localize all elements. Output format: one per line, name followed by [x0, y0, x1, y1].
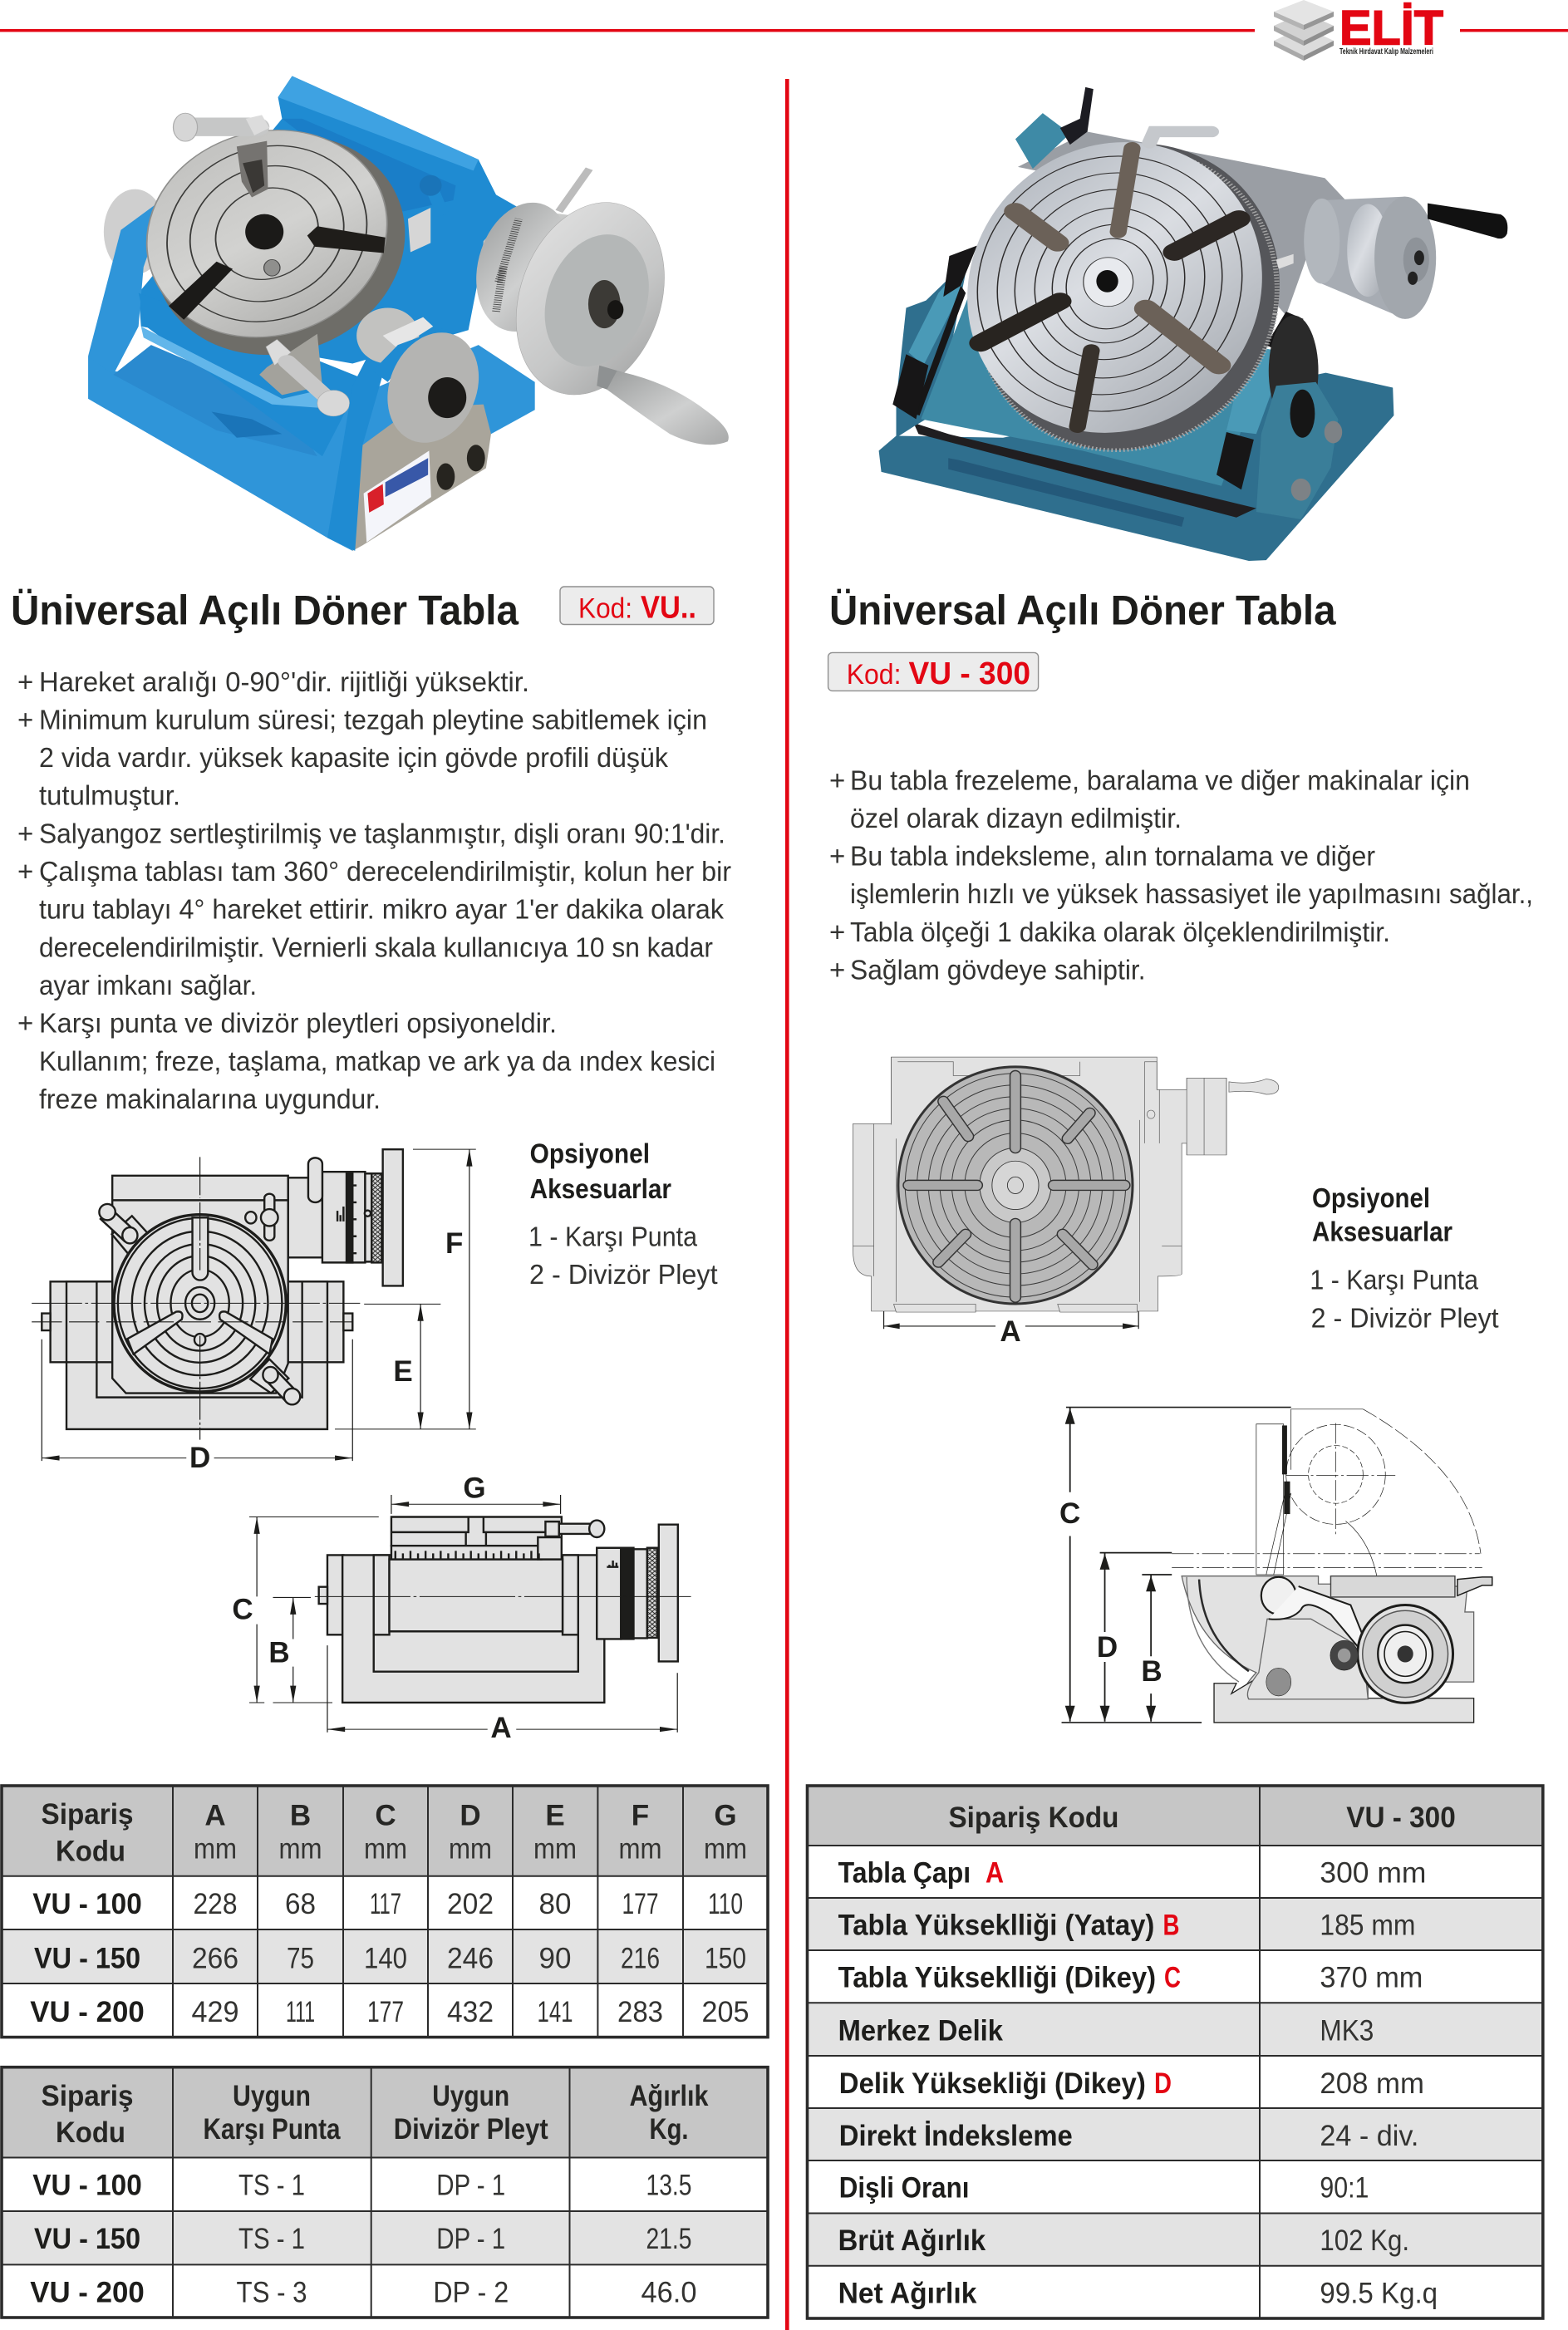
row VU-100: 110 [708, 1888, 743, 1920]
table header row: C [375, 1800, 396, 1832]
row delik yuksekligi: 208 mm [1320, 2067, 1424, 2100]
table header row: F [632, 1800, 649, 1832]
row delik yuksekligi: Delik Yüksekliği (Dikey) [839, 2067, 1146, 2100]
row VU-150 [2, 1929, 768, 1983]
row direkt indeksleme: Direkt İndeksleme [839, 2120, 1073, 2152]
row net agirlik [808, 2266, 1543, 2318]
dimension labels G C B A: G [463, 1472, 486, 1504]
left feature list: freze makinalarına uygundur. [39, 1084, 381, 1114]
row VU-200: 111 [286, 1996, 315, 2028]
dimension labels D E F: E [393, 1355, 413, 1388]
left accessories note: Aksesuarlar [530, 1173, 671, 1204]
code badge VU-300: Kod: [847, 659, 901, 691]
dimension labels G C B A: C [232, 1594, 253, 1625]
table header row: Kodu [56, 2116, 125, 2149]
code badge VU-300: VU - 300 [909, 656, 1030, 691]
right feature list: Bu tabla frezeleme, baralama ve diğer makinalar için [850, 764, 1470, 795]
row VU-100: VU - 100 [32, 2170, 142, 2202]
row merkez delik: MK3 [1320, 2014, 1374, 2047]
table header row: D [460, 1800, 481, 1832]
right accessories note: Opsiyonel [1312, 1182, 1430, 1213]
row VU-150: 266 [192, 1943, 238, 1975]
table header row: A [204, 1800, 226, 1832]
right feature list: özel olarak dizayn edilmiştir. [850, 803, 1182, 833]
row VU-200 [2, 2264, 768, 2318]
row VU-200: 141 [537, 1996, 573, 2028]
row yukseklik yatay [808, 1898, 1543, 1950]
row VU-200: DP - 2 [433, 2277, 509, 2309]
row brut agirlik [808, 2214, 1543, 2266]
left feature list: Karşı punta ve divizör pleytleri opsiyoneldir. [39, 1008, 557, 1039]
table header row: Kg. [650, 2113, 688, 2146]
row VU-150: 140 [364, 1943, 407, 1975]
right feature list: işlemlerin hızlı ve yüksek hassasiyet ile yapılmasını sağlar., [850, 878, 1533, 909]
dimension labels D E F: D [189, 1442, 210, 1474]
code badge VU: Kod: [578, 593, 632, 625]
row direkt indeksleme [808, 2108, 1543, 2160]
dimension labels C D B [1059, 1497, 1162, 1688]
lower index plate [327, 308, 491, 551]
row VU-200 [2, 1983, 768, 2038]
left feature list: + [17, 1008, 33, 1039]
right feature list: Sağlam gövdeye sahiptir. [850, 954, 1146, 985]
table header row [2, 1786, 768, 1876]
row disli orani [808, 2160, 1543, 2214]
row VU-100: VU - 100 [32, 1888, 142, 1920]
row VU-150: 21.5 [646, 2223, 691, 2255]
row VU-150: 246 [447, 1943, 494, 1975]
row net agirlik: 99.5 Kg.q [1320, 2277, 1438, 2309]
row VU-200: 205 [701, 1996, 750, 2028]
table header row: Kodu [56, 1836, 125, 1868]
row yukseklik dikey: Tabla Yükseklliği (Dikey) [838, 1961, 1156, 1993]
row tabla capi: Tabla Çapı [838, 1856, 971, 1889]
dimension labels G C B A: A [490, 1712, 512, 1744]
table header row: mm [194, 1833, 237, 1865]
row VU-200: 177 [367, 1996, 404, 2028]
table header row: mm [704, 1833, 747, 1865]
left accessories note [528, 1138, 718, 1290]
right feature list: Bu tabla indeksleme, alın tornalama ve diğer [850, 841, 1375, 872]
table header row: mm [618, 1833, 661, 1865]
row VU-100: TS - 1 [238, 2170, 305, 2202]
row direkt indeksleme: 24 - div. [1320, 2120, 1418, 2152]
right handwheel [1304, 197, 1507, 319]
right accessories note [1310, 1182, 1499, 1334]
row disli orani: Dişli Oranı [839, 2172, 969, 2205]
left feature list: Hareket aralığı 0-90°'dir. rijitliği yüksektir. [39, 666, 529, 697]
row yukseklik yatay: Tabla Yükseklliği (Yatay) [838, 1910, 1154, 1942]
row yukseklik dikey: 370 mm [1320, 1961, 1423, 1993]
dimension labels D E F: F [445, 1227, 463, 1260]
dimension labels C D B: D [1097, 1631, 1118, 1664]
table header row: mm [449, 1833, 492, 1865]
table header row: Sipariş Kodu [949, 1802, 1118, 1834]
right feature list: + [829, 954, 845, 985]
right feature list: + [829, 841, 845, 872]
code badge VU [560, 587, 714, 626]
left feature list: tutulmuştur. [39, 780, 180, 811]
table: VU dimensions [2, 1786, 768, 2038]
row VU-100: 202 [447, 1888, 494, 1920]
table header row: Uygun [233, 2080, 311, 2112]
right accessories note: 1 - Karşı Punta [1310, 1265, 1479, 1295]
row merkez delik: Merkez Delik [838, 2014, 1003, 2047]
row VU-150: DP - 1 [436, 2223, 505, 2255]
left handwheel [465, 169, 729, 445]
row VU-200: TS - 3 [236, 2277, 307, 2309]
row brut agirlik: 102 Kg. [1320, 2224, 1409, 2257]
header rule left [0, 29, 1255, 32]
right feature list: + [829, 917, 845, 947]
table header row: mm [279, 1833, 322, 1865]
row VU-200: 283 [617, 1996, 663, 2028]
left feature list: Çalışma tablası tam 360° derecelendirilmiştir, kolun her bir [39, 856, 731, 887]
right drawing: side view with dimensions [1059, 1408, 1492, 1723]
dimension label A: A [1000, 1315, 1021, 1348]
left feature list: 2 vida vardır. yüksek kapasite için gövde profili düşük [39, 742, 668, 773]
right accessories note: 2 - Divizör Pleyt [1311, 1303, 1499, 1334]
right drawing: plan view [853, 1057, 1279, 1348]
row VU-100: 80 [538, 1888, 572, 1920]
row VU-150 [2, 2211, 768, 2264]
dimension labels D E F [189, 1227, 463, 1474]
row tabla capi [808, 1846, 1543, 1898]
dimension labels C D B: B [1141, 1655, 1162, 1688]
row merkez delik [808, 2003, 1543, 2056]
left drawing: plan view with dimensions [32, 1149, 476, 1474]
row VU-150: VU - 150 [34, 2223, 140, 2255]
row delik yuksekligi: D [1154, 2067, 1172, 2100]
table header row: VU - 300 [1346, 1802, 1456, 1834]
table header row: G [714, 1800, 737, 1832]
code badge VU: VU.. [641, 591, 696, 626]
table header row [808, 1786, 1543, 1846]
dimension labels C D B: C [1059, 1497, 1080, 1530]
row yukseklik yatay: B [1163, 1910, 1180, 1942]
table header row: Sipariş [42, 2080, 133, 2112]
table header row: B [290, 1800, 311, 1832]
dimension labels G C B A: B [268, 1637, 290, 1669]
row VU-150: 75 [287, 1943, 314, 1975]
row VU-200: 46.0 [641, 2277, 696, 2309]
icon: stacked plates [1274, 0, 1334, 61]
table header row: Uygun [432, 2080, 509, 2112]
table header row [2, 2067, 768, 2157]
row VU-200: 432 [447, 1996, 494, 2028]
code badge VU-300 [828, 652, 1039, 691]
table header row: Karşı Punta [203, 2113, 341, 2146]
row VU-150: VU - 150 [34, 1943, 140, 1975]
left feature list: Salyangoz sertleştirilmiş ve taşlanmıştır, dişli oranı 90:1'dir. [39, 818, 725, 848]
left feature list: + [17, 666, 33, 697]
table: VU-300 specifications [808, 1786, 1543, 2318]
row VU-150: 150 [705, 1943, 746, 1975]
row VU-100 [2, 2157, 768, 2211]
table slots [169, 141, 386, 320]
row VU-150: 90 [538, 1943, 572, 1975]
row yukseklik dikey [808, 1950, 1543, 2003]
left feature list: turu tablayı 4° hareket ettirir. mikro ayar 1'er dakika olarak [39, 894, 724, 925]
row VU-100: 13.5 [646, 2170, 691, 2202]
logo: ELİT [1274, 0, 1443, 61]
left accessories note: 2 - Divizör Pleyt [529, 1259, 718, 1290]
row VU-100 [2, 1876, 768, 1929]
right accessories note: Aksesuarlar [1312, 1217, 1452, 1247]
row VU-200: 429 [191, 1996, 239, 2028]
row VU-100: 228 [193, 1888, 238, 1920]
table header row: E [545, 1800, 565, 1832]
left accessories note: 1 - Karşı Punta [528, 1222, 698, 1251]
table header row: mm [364, 1833, 407, 1865]
table header row: Sipariş [42, 1798, 133, 1831]
row delik yuksekligi [808, 2056, 1543, 2108]
table: VU accessories and weight [2, 2067, 768, 2318]
right feature list [829, 764, 1533, 985]
left feature list: derecelendirilmiştir. Vernierli skala kullanıcıya 10 sn kadar [39, 932, 713, 962]
row VU-100: 177 [622, 1888, 658, 1920]
row net agirlik: Net Ağırlık [838, 2277, 977, 2309]
left feature list: Minimum kurulum süresi; tezgah pleytine sabitlemek için [39, 704, 707, 735]
left feature list: Kullanım; freze, taşlama, matkap ve ark ya da ındex kesici [39, 1045, 715, 1076]
center divider [785, 79, 789, 2330]
row VU-150: 216 [621, 1943, 660, 1975]
header rule right [1460, 29, 1568, 32]
dimension labels G C B A [232, 1472, 512, 1744]
logo tagline: Teknik Hırdavat Kalıp Malzemeleri [1339, 47, 1433, 57]
product photo: blue universal tilting table [88, 76, 729, 551]
row yukseklik yatay: 185 mm [1320, 1910, 1415, 1942]
right feature list: Tabla ölçeği 1 dakika olarak ölçeklendirilmiştir. [850, 917, 1390, 947]
row brut agirlik: Brüt Ağırlık [838, 2224, 986, 2257]
table header row: Ağırlık [630, 2080, 709, 2112]
left accessories note: Opsiyonel [530, 1138, 650, 1168]
left feature list: + [17, 818, 33, 848]
left drawing: side view with dimensions [232, 1472, 691, 1744]
row disli orani: 90:1 [1320, 2172, 1369, 2205]
left title: Üniversal Açılı Döner Tabla [11, 587, 519, 633]
row VU-100: 68 [285, 1888, 316, 1920]
left feature list: + [17, 856, 33, 887]
table header row: Divizör Pleyt [394, 2113, 548, 2146]
left feature list: ayar imkanı sağlar. [39, 970, 257, 1000]
product photo: teal large tilting table [879, 87, 1507, 561]
left feature list [17, 666, 731, 1114]
table header row: mm [533, 1833, 577, 1865]
right title: Üniversal Açılı Döner Tabla [829, 587, 1337, 634]
row VU-200: VU - 200 [30, 2277, 145, 2309]
row yukseklik dikey: C [1164, 1961, 1181, 1993]
logo wordmark: ELİT [1339, 2, 1443, 56]
row tabla capi: 300 mm [1320, 1856, 1426, 1889]
row VU-100: DP - 1 [436, 2170, 505, 2202]
row VU-100: 117 [370, 1888, 401, 1920]
right feature list: + [829, 764, 845, 795]
row tabla capi: A [986, 1856, 1004, 1889]
left feature list: + [17, 704, 33, 735]
row VU-150: TS - 1 [238, 2223, 305, 2255]
row VU-200: VU - 200 [30, 1996, 145, 2028]
